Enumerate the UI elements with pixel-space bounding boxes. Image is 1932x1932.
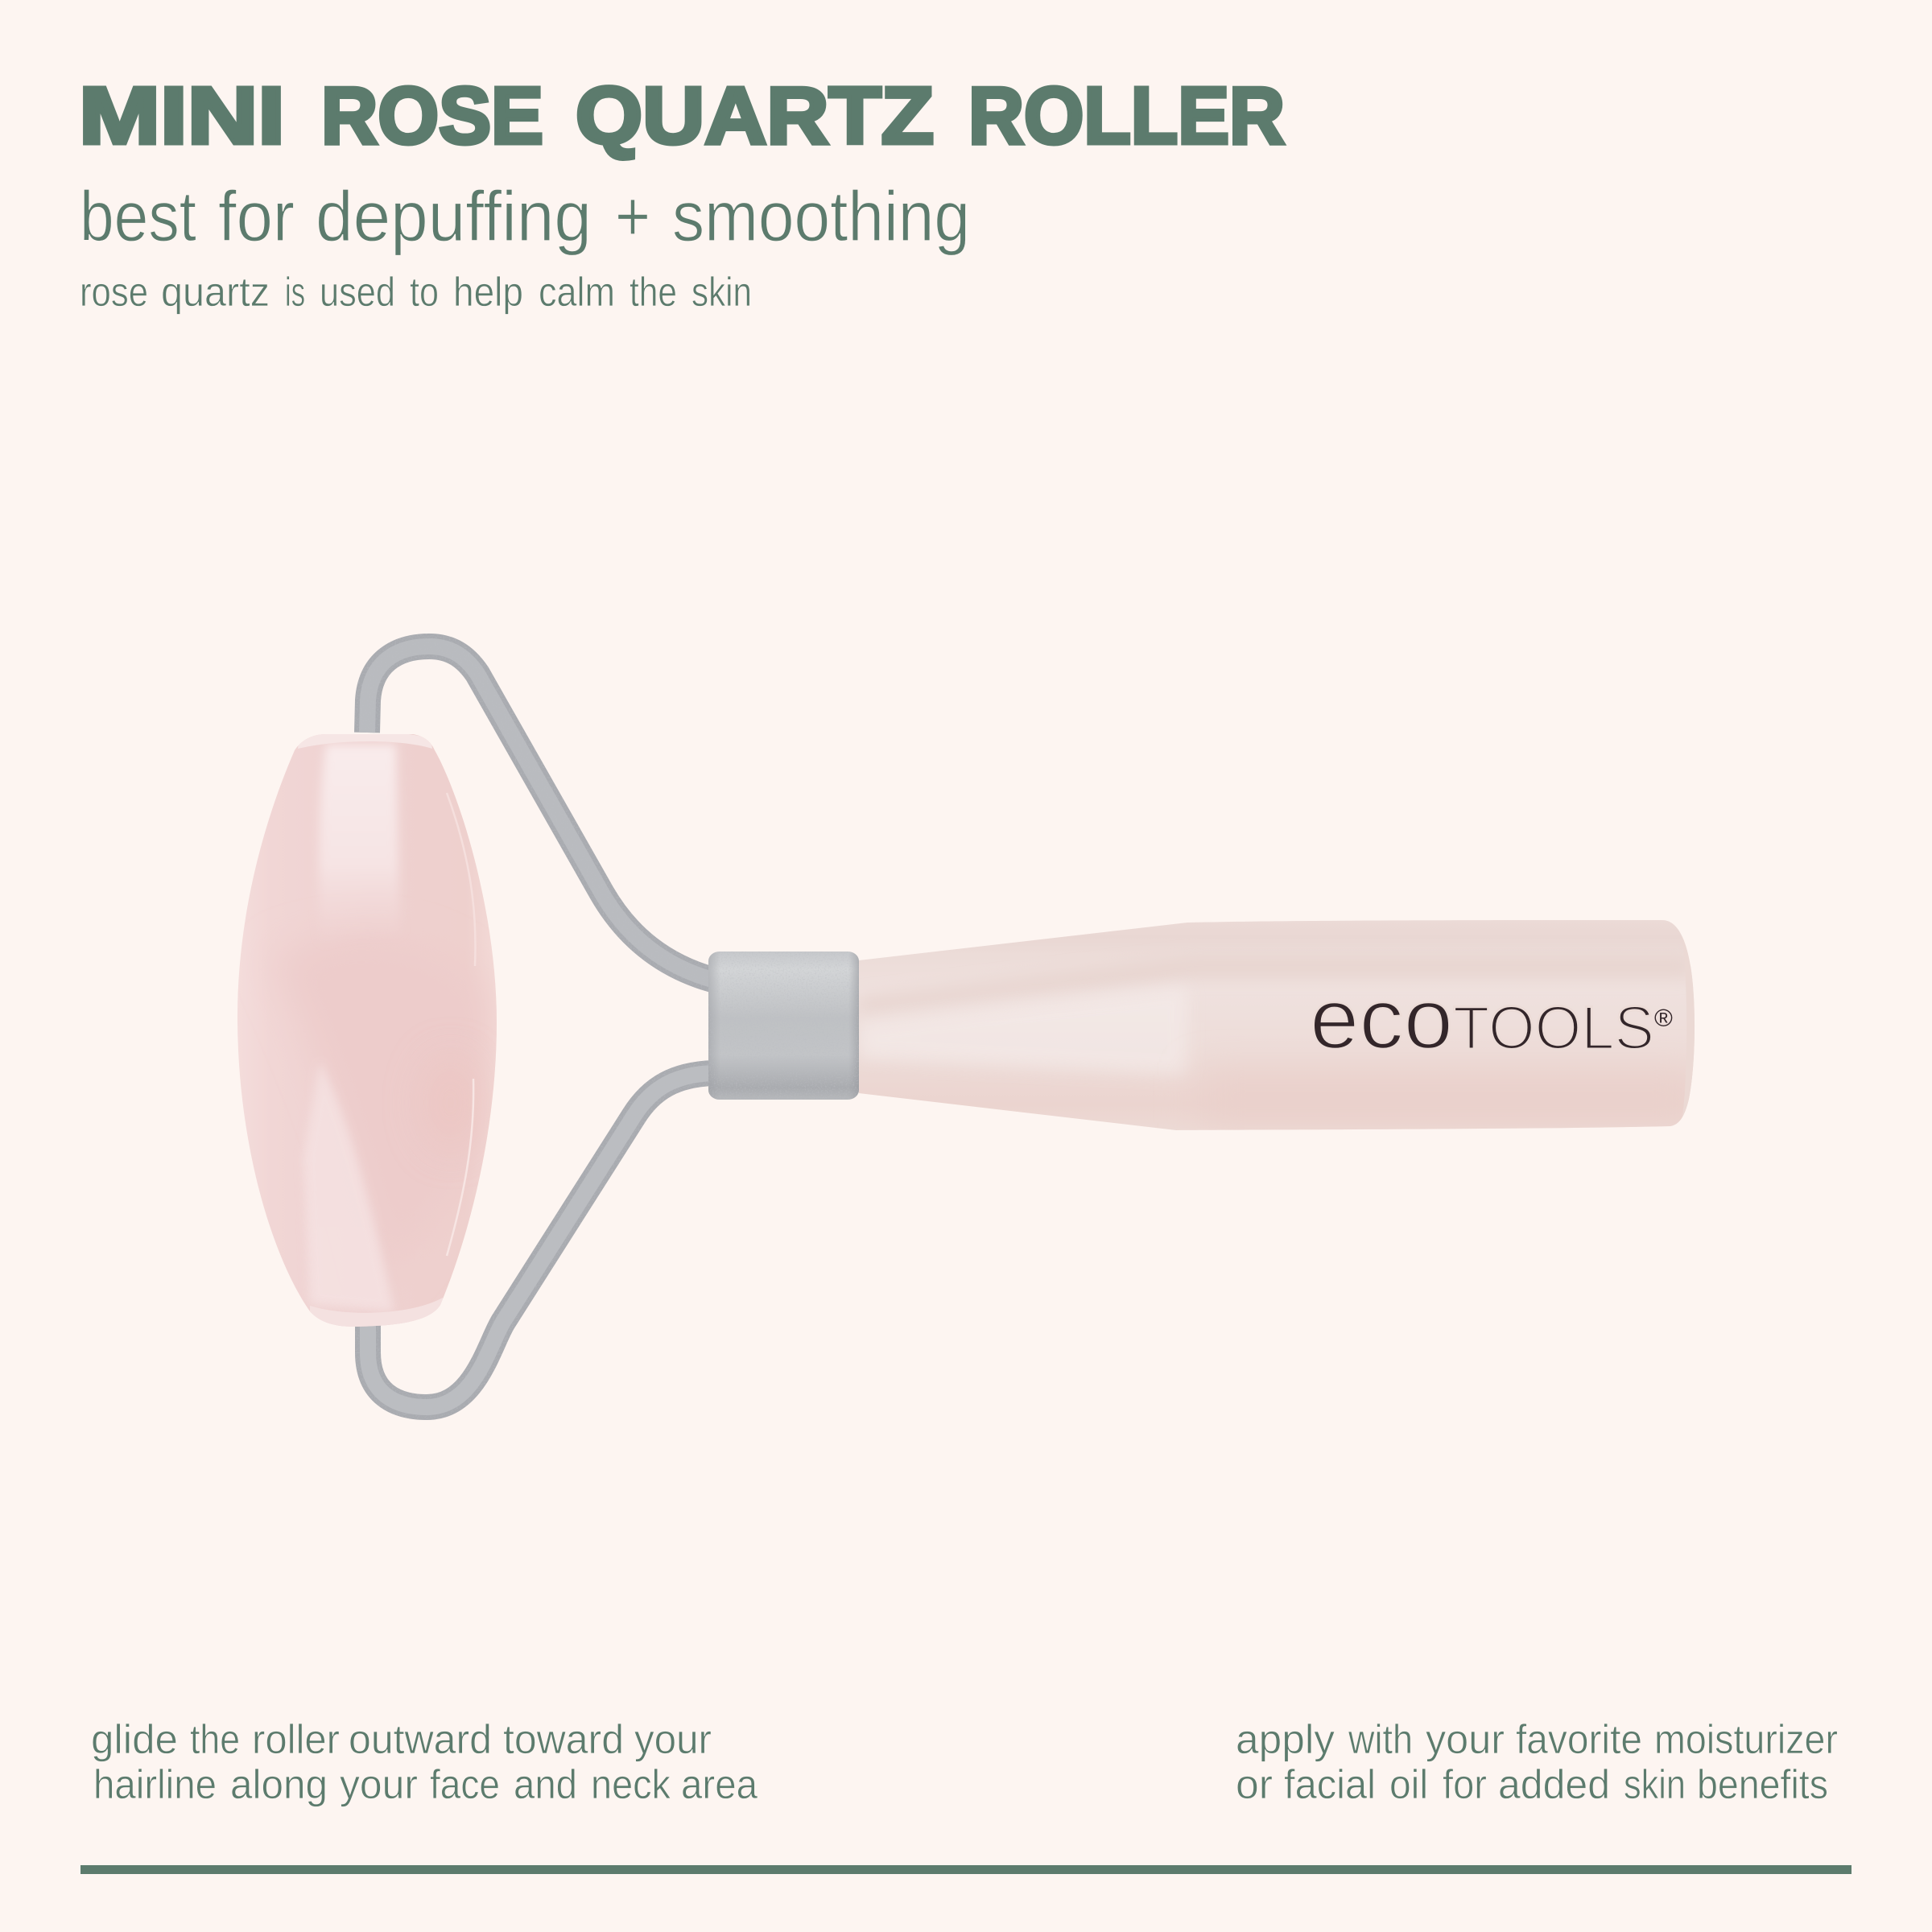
title: QUARTZ [576,71,934,161]
tip line 2: hairline [93,1761,217,1807]
title: MINI [79,71,285,161]
description: used [320,269,395,315]
tip line 1: roller [252,1716,340,1762]
stone roller [233,724,503,1336]
tip line 1: your [1426,1716,1505,1762]
subtitle: depuffing [316,176,592,256]
handle [859,920,1695,1130]
logo: registered mark: ® [1654,1004,1673,1032]
tip line 2: area [681,1761,758,1807]
tip line 2: added [1498,1761,1610,1807]
subtitle: best [80,176,196,256]
subtitle: for [218,176,295,256]
title: ROLLER [968,71,1285,161]
usage tip: right [1236,1716,1838,1807]
description: quartz [161,269,270,315]
tip line 1: apply [1236,1716,1335,1762]
description: is [285,269,305,315]
description: calm [539,269,615,315]
logo: tools: TOOLS [1453,994,1654,1063]
handle logo [1310,972,1673,1067]
tip line 2: facial [1284,1761,1376,1807]
tip line 1: moisturizer [1654,1716,1838,1762]
usage tip: left [91,1716,758,1807]
description: rose [80,269,148,315]
tip line 2: for [1443,1761,1487,1807]
tip line 1: favorite [1516,1716,1642,1762]
tip line 2: face [430,1761,500,1807]
logo: eco: eco [1310,972,1453,1067]
tip line 1: the [190,1716,240,1762]
tip line 1: glide [91,1716,178,1762]
description: the [630,269,677,315]
tip line 1: toward [503,1716,624,1762]
subtitle: + [615,176,650,256]
description: to [410,269,439,315]
tip line 2: along [230,1761,328,1807]
bottom rule [80,1865,1852,1874]
product: rose quartz roller [233,646,1707,1407]
description: help [453,269,523,315]
tip line 2: neck [591,1761,671,1807]
tip line 2: your [340,1761,418,1807]
tip line 1: your [634,1716,712,1762]
tip line 2: or [1236,1761,1273,1807]
subtitle: smoothing [672,176,970,256]
tip line 1: with [1348,1716,1413,1762]
tip line 1: outward [349,1716,492,1762]
tip line 2: skin [1624,1761,1686,1807]
title: ROSE [321,71,543,161]
wire frame: bottom [368,1073,712,1407]
metal collar [708,952,859,1100]
tip line 2: oil [1389,1761,1428,1807]
tip line 2: benefits [1697,1761,1828,1807]
tip line 2: and [514,1761,577,1807]
description: skin [691,269,752,315]
wire frame: top [367,646,712,980]
